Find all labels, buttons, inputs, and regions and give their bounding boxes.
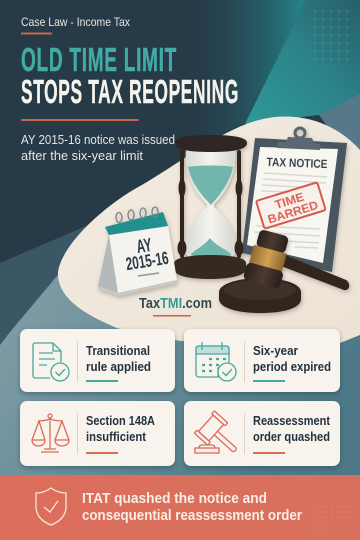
- card text: Six-year: [253, 343, 298, 358]
- banner text: ITAT quashed the notice and: [82, 490, 267, 507]
- card text: insufficient: [86, 429, 147, 444]
- clipboard clip: [277, 128, 320, 150]
- illustration: hourglass: [174, 135, 247, 279]
- notice heading: TAX NOTICE: [266, 155, 328, 171]
- card text: [253, 413, 331, 444]
- icon: scales of justice: [32, 414, 69, 452]
- illustration: gavel: [219, 228, 349, 313]
- gavel head: [243, 228, 293, 289]
- illustration: desk calendar: [98, 207, 177, 296]
- card text: Transitional: [86, 343, 150, 358]
- card: reassessment order quashed: [184, 401, 340, 466]
- calendar label: [124, 235, 170, 274]
- notice lines: [254, 173, 327, 248]
- hourglass cap: [175, 135, 247, 152]
- illustration: clipboard with tax notice: [242, 128, 347, 272]
- title accent rule: [21, 119, 138, 121]
- card text: Section 148A: [86, 413, 156, 428]
- card: six-year period expired: [184, 329, 340, 392]
- banner text: consequential reassessment order: [82, 507, 302, 524]
- subtitle: AY 2015-16 notice was issued: [21, 132, 175, 147]
- card text: [86, 413, 156, 444]
- hourglass base: [174, 255, 246, 279]
- card text: [86, 343, 151, 374]
- heading accent rule: [21, 32, 52, 34]
- banner text: [82, 490, 302, 524]
- brand: TaxTMI.com: TaxTMI.com: [139, 296, 212, 312]
- card text: rule applied: [86, 359, 151, 374]
- card: section 148A insufficient: [20, 401, 175, 466]
- calendar label: AY: [135, 235, 153, 258]
- hourglass pillars: [178, 150, 244, 258]
- stamp: time barred: TIME: [273, 190, 306, 212]
- icon: calendar check: [196, 342, 236, 381]
- icon: gavel outline: [194, 411, 246, 461]
- card: transitional rule applied: [20, 329, 175, 392]
- subtitle: after the six-year limit: [21, 148, 143, 163]
- hourglass sand: [188, 166, 233, 262]
- icon: document check: [33, 343, 69, 381]
- hourglass glass: [184, 150, 237, 261]
- stamp: time barred: BARRED: [266, 198, 320, 227]
- card text: period expired: [253, 359, 331, 374]
- small heading: Case Law - Income Tax: [21, 15, 130, 29]
- calendar rings: [116, 207, 158, 222]
- subtitle: [21, 132, 175, 163]
- calendar label: 2015-16: [124, 248, 170, 274]
- card text: [253, 343, 331, 374]
- gavel handle: [281, 255, 349, 290]
- cream backdrop shape: [58, 117, 360, 347]
- card text: Reassessment: [253, 413, 331, 428]
- title: [21, 41, 239, 110]
- title: OLD TIME LIMIT: [21, 41, 177, 78]
- icon: shield check: [36, 488, 66, 525]
- stamp: time barred: [256, 182, 326, 229]
- banner: conclusion: [0, 475, 360, 540]
- gavel sound block: [219, 278, 301, 313]
- card text: order quashed: [253, 429, 330, 444]
